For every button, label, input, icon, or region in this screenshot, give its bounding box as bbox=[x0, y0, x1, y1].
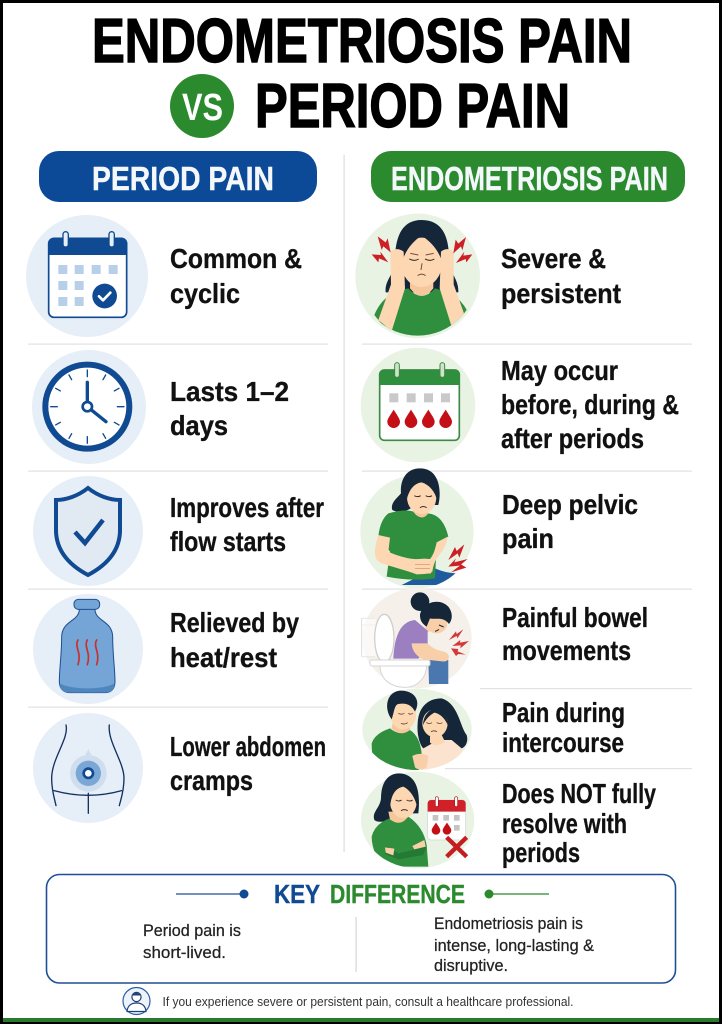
row: may occur before, during, after bbox=[361, 348, 679, 462]
label: pain bbox=[502, 523, 554, 554]
vs badge: VS bbox=[182, 87, 223, 129]
text: endometriosis pain summary: Endometriosis pain is bbox=[434, 914, 583, 933]
row: deep pelvic pain bbox=[360, 468, 638, 588]
label: Painful bowel bbox=[502, 602, 648, 633]
icon: abdomen bbox=[33, 713, 143, 823]
icon: calendar with check bbox=[26, 215, 148, 337]
row: pain during intercourse bbox=[362, 689, 625, 773]
heading: key difference bbox=[176, 879, 549, 909]
label: before, during & bbox=[501, 389, 679, 420]
label: after periods bbox=[501, 423, 644, 454]
panel: period pain bbox=[26, 151, 328, 823]
icon: shield with check bbox=[33, 476, 143, 586]
label: May occur bbox=[501, 355, 618, 386]
label: heat/rest bbox=[170, 642, 277, 673]
heading: period pain bbox=[39, 151, 317, 202]
title: PERIOD PAIN bbox=[255, 72, 570, 141]
text: period pain summary: Period pain is bbox=[143, 921, 241, 940]
label bbox=[501, 355, 679, 454]
heading: key difference: KEY bbox=[274, 879, 320, 909]
row: relieved by heat/rest bbox=[33, 594, 299, 704]
label: Severe & bbox=[501, 243, 606, 274]
label: flow starts bbox=[170, 526, 286, 557]
icon: doctor bbox=[123, 988, 150, 1014]
label bbox=[502, 602, 648, 666]
icon: calendar with blood drops bbox=[361, 348, 475, 462]
label: Common & bbox=[170, 243, 302, 274]
heading: period pain: PERIOD PAIN bbox=[92, 160, 274, 197]
icon: woman with crossed-out calendar bbox=[361, 772, 474, 868]
row: common and cyclic bbox=[26, 215, 302, 337]
row: lower abdomen cramps bbox=[33, 713, 326, 823]
heading: key difference: DIFFERENCE bbox=[330, 879, 465, 909]
panel: key difference bbox=[46, 874, 676, 983]
center column divider bbox=[344, 155, 345, 852]
vs badge bbox=[170, 74, 234, 138]
text: period pain summary: short-lived. bbox=[143, 943, 226, 962]
label bbox=[170, 243, 302, 309]
label: Deep pelvic bbox=[502, 489, 638, 520]
footer note bbox=[123, 988, 574, 1014]
text: endometriosis pain summary: disruptive. bbox=[434, 956, 508, 975]
label bbox=[170, 376, 289, 441]
icon: woman holding head bbox=[355, 214, 480, 338]
label: cramps bbox=[170, 765, 253, 796]
heading: endometriosis pain bbox=[371, 151, 685, 202]
row: does not fully resolve bbox=[361, 772, 656, 868]
title bbox=[92, 7, 632, 141]
row: lasts 1-2 days bbox=[32, 350, 289, 464]
row: painful bowel movements bbox=[362, 588, 648, 688]
label: movements bbox=[502, 635, 631, 666]
label: Does NOT fully bbox=[502, 778, 656, 809]
label: Lower abdomen bbox=[170, 731, 326, 762]
label: periods bbox=[502, 837, 580, 868]
label: Improves after bbox=[170, 492, 324, 523]
icon: woman holding abdomen bbox=[360, 468, 474, 588]
label bbox=[502, 778, 656, 868]
label: cyclic bbox=[170, 278, 240, 309]
disclaimer text: If you experience severe or persistent pain, consult a healthcare professional. bbox=[162, 994, 574, 1009]
text: endometriosis pain summary: intense, long-lasting & bbox=[434, 936, 595, 955]
text: period pain summary bbox=[143, 921, 241, 962]
label: intercourse bbox=[502, 727, 624, 758]
label: resolve with bbox=[502, 808, 627, 839]
text: endometriosis pain summary bbox=[434, 914, 595, 975]
label bbox=[170, 607, 299, 673]
row: improves after flow starts bbox=[33, 476, 324, 586]
icon: couple bbox=[362, 689, 472, 773]
label bbox=[170, 731, 326, 796]
label: Lasts 1–2 bbox=[170, 376, 289, 407]
label: Relieved by bbox=[170, 607, 299, 638]
label bbox=[170, 492, 324, 557]
icon: woman on toilet bbox=[362, 588, 472, 688]
row: severe and persistent bbox=[355, 214, 621, 338]
label bbox=[502, 489, 638, 554]
icon: clock bbox=[32, 350, 146, 464]
label: days bbox=[170, 410, 228, 441]
label: persistent bbox=[501, 278, 621, 309]
label bbox=[501, 243, 621, 309]
icon: hot water bottle bbox=[33, 594, 143, 704]
panel: endometriosis pain bbox=[355, 151, 692, 868]
label bbox=[502, 697, 625, 758]
label: Pain during bbox=[502, 697, 625, 728]
